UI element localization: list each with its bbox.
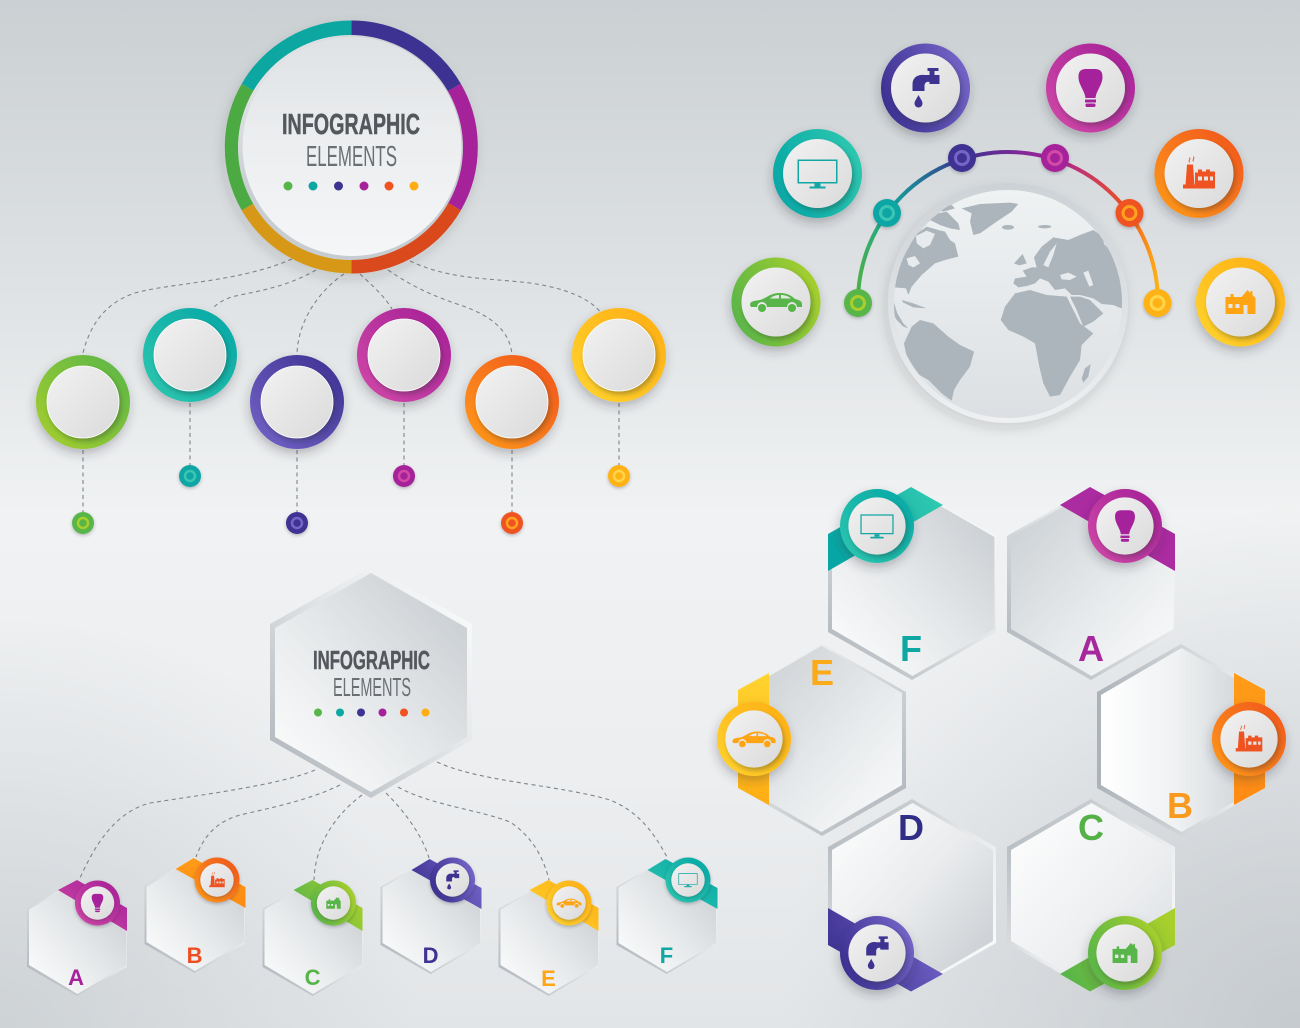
icon: factory	[1154, 129, 1244, 218]
icon: tv	[773, 129, 862, 218]
hexagon F: F	[900, 628, 922, 669]
colored arc	[858, 152, 1158, 302]
small hexagon B: B	[187, 943, 202, 968]
small hexagon E: E	[541, 966, 556, 991]
small hexagon D: D	[423, 943, 438, 968]
hexagon C	[1007, 799, 1175, 992]
icon: tap	[881, 44, 970, 132]
world map	[890, 203, 1133, 401]
main title: INFOGRAPHIC	[282, 109, 420, 141]
main disc	[238, 35, 463, 260]
hexagon C: C	[1078, 807, 1104, 848]
small hexagon B	[144, 857, 246, 973]
hexagon A	[1007, 487, 1175, 680]
main subtitle: ELEMENTS	[306, 141, 397, 173]
small hexagon F	[616, 858, 718, 974]
small hexagon C	[262, 880, 362, 996]
ring segments	[233, 29, 469, 265]
hexagon color dots	[314, 708, 430, 716]
hexagon E	[717, 644, 906, 836]
magenta circle	[357, 308, 451, 402]
hexagon B: B	[1167, 785, 1193, 826]
small hexagon F: F	[660, 943, 673, 968]
small hexagon E	[498, 880, 598, 996]
hexagon subtitle: ELEMENTS	[333, 672, 411, 702]
hexagon title: INFOGRAPHIC	[313, 645, 430, 675]
hexagon D: D	[898, 807, 924, 848]
icon: car	[732, 258, 820, 346]
dashed connectors from main hexagon	[80, 762, 667, 880]
hexagon F	[828, 487, 996, 680]
green circle	[36, 355, 130, 449]
color dots	[284, 182, 418, 190]
dashed connectors from main circle	[83, 259, 619, 512]
arc nodes	[844, 144, 1172, 317]
orange circle	[465, 355, 559, 449]
teal circle	[143, 308, 237, 402]
small hexagon A: A	[68, 965, 84, 990]
globe	[888, 183, 1133, 423]
icon: light bulb	[1046, 44, 1135, 132]
icon: house	[1196, 258, 1285, 346]
small hexagon C: C	[305, 965, 321, 990]
panel: hexagon ring	[717, 487, 1286, 992]
panel: globe with arc of icons	[732, 44, 1285, 423]
yellow circle	[572, 308, 666, 402]
hexagon E: E	[810, 652, 834, 693]
main hexagon	[270, 567, 472, 798]
hexagon D	[828, 799, 996, 992]
small hexagon A	[27, 880, 127, 996]
hexagon A: A	[1078, 628, 1104, 669]
hexagon B	[1097, 644, 1286, 836]
panel: circular tree diagram	[36, 29, 666, 534]
purple circle	[250, 355, 344, 449]
main multicolor ring circle	[233, 29, 469, 265]
panel: hexagon tree diagram	[27, 567, 718, 996]
small end nodes	[72, 465, 630, 534]
small hexagon D	[380, 858, 482, 974]
